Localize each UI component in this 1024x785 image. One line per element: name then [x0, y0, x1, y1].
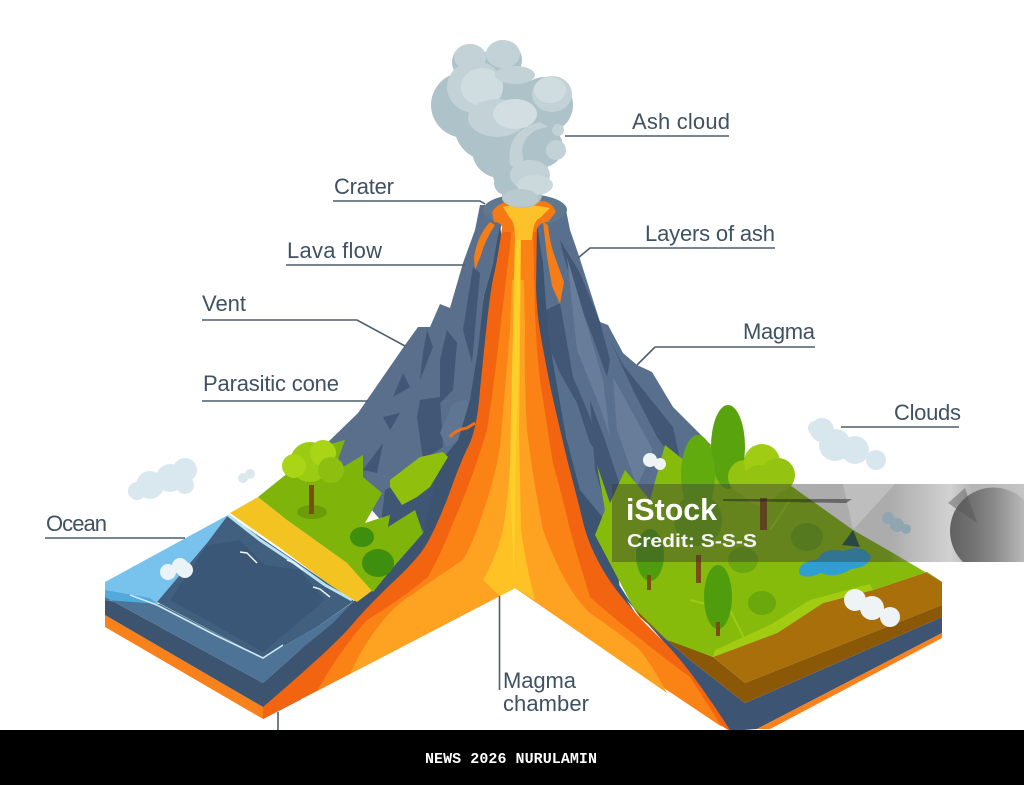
watermark band: Credit: S-S-S — [627, 531, 757, 551]
left grass — [258, 440, 448, 592]
label: magma — [637, 319, 816, 365]
label: ash cloud: Ash cloud — [632, 109, 730, 134]
right trees — [636, 405, 823, 636]
label: clouds — [841, 400, 961, 427]
label: lava flow: Lava flow — [287, 238, 382, 263]
ash cloud — [431, 40, 573, 208]
label: parasitic cone: Parasitic cone — [203, 371, 339, 396]
watermark band — [612, 484, 1024, 562]
left tree and bushes — [282, 440, 394, 577]
label: crater: Crater — [334, 174, 394, 199]
volcano mountain — [323, 205, 713, 533]
right land block — [590, 440, 942, 731]
label: magma chamber: chamber — [503, 691, 589, 716]
central magma section — [263, 222, 730, 730]
black footer bar: NEWS 2026 NURULAMIN — [425, 751, 597, 768]
clouds — [128, 418, 900, 627]
label: clouds: Clouds — [894, 400, 961, 425]
label: ocean — [45, 511, 185, 538]
black footer bar — [0, 730, 1024, 785]
label: ocean: Ocean — [46, 511, 107, 536]
label: layers of ash: Layers of ash — [645, 221, 775, 246]
label: crater — [333, 174, 485, 204]
label: layers of ash — [578, 221, 775, 258]
dark rock strip along the section — [263, 225, 640, 719]
left land block: ocean and beach — [105, 497, 440, 719]
label: magma: Magma — [743, 319, 816, 344]
label: magma chamber — [500, 596, 589, 716]
crater and lava streams — [474, 194, 567, 304]
label: vent: Vent — [202, 291, 246, 316]
leader line stub — [277, 712, 279, 730]
watermark band: iStock — [626, 492, 718, 527]
label: vent — [202, 291, 405, 346]
label: magma chamber: Magma — [503, 668, 577, 693]
